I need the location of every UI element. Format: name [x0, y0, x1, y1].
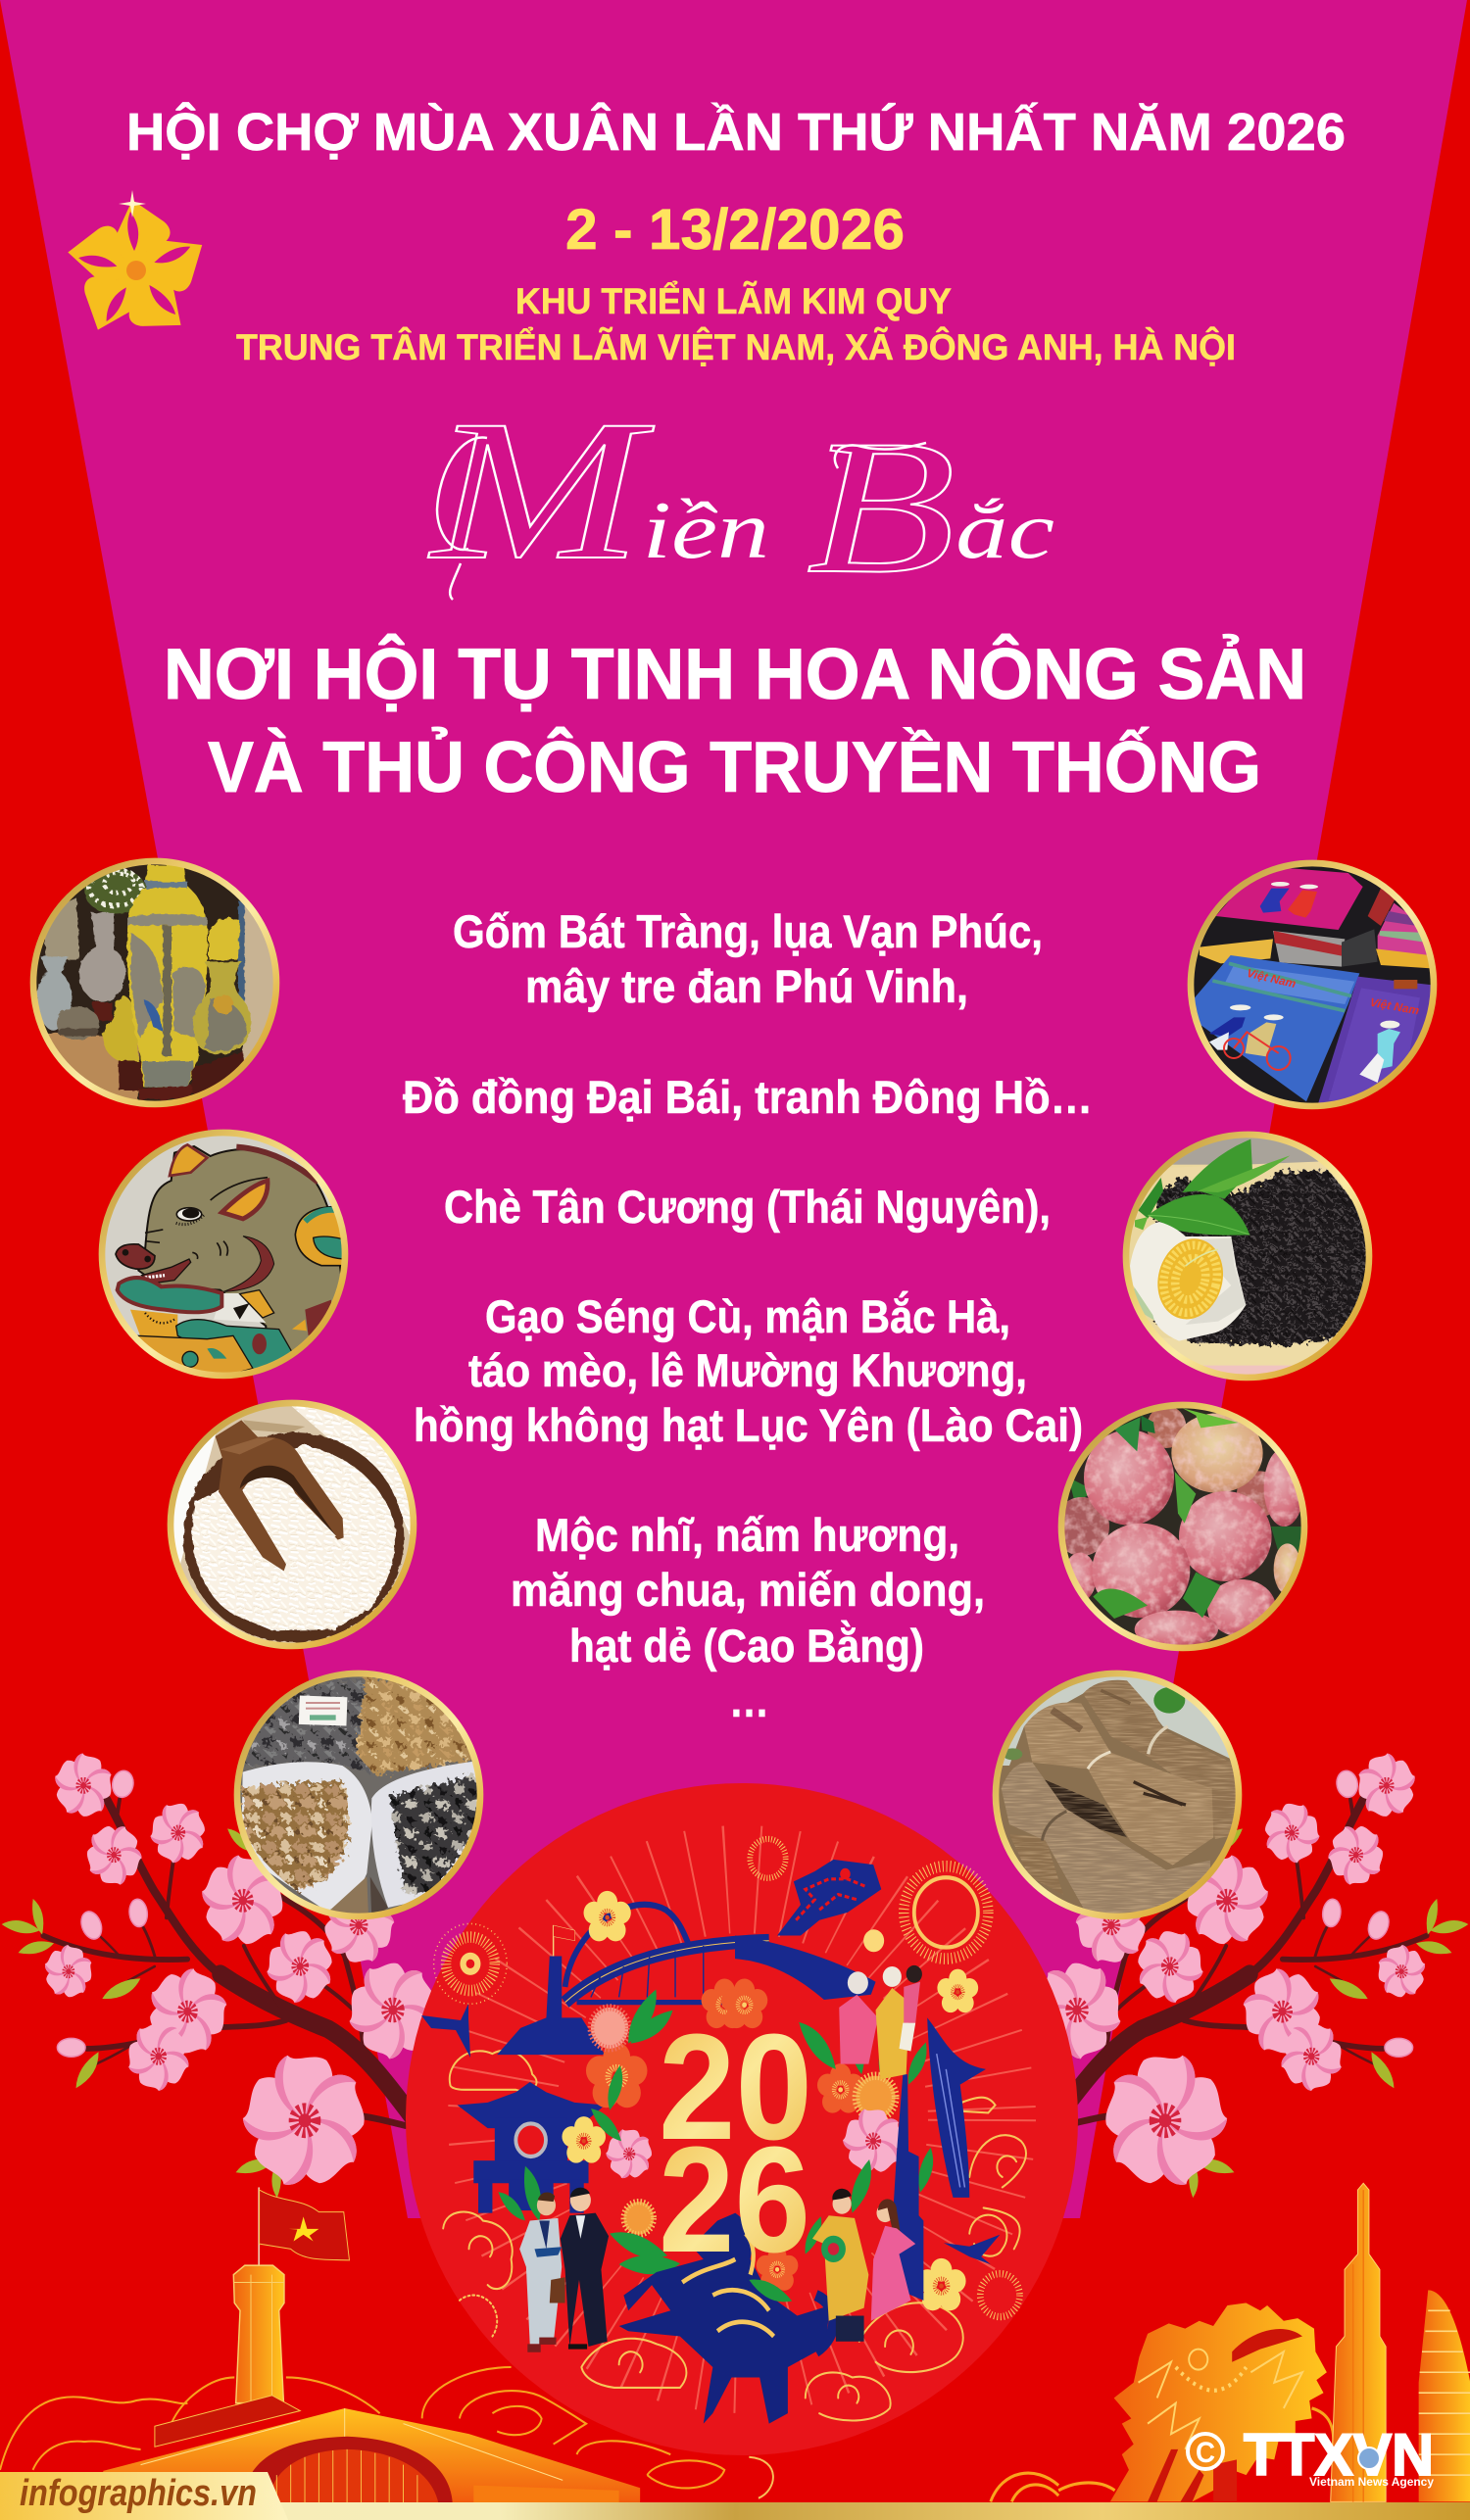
flagpole and flag — [259, 2187, 349, 2267]
Landmark tower — [1331, 2183, 1386, 2501]
header: fair title: HỘI CHỢ MÙA XUÂN LẦN THỨ NHẤT NĂM 2026 — [126, 102, 1346, 162]
bridge and dragon arch — [565, 1905, 769, 2003]
left bottom illustration: flag tower and dome — [0, 2187, 724, 2503]
emblem flowers left — [496, 1891, 748, 2277]
TTXVN logo: C — [1196, 2437, 1215, 2469]
bottom gold strip — [0, 2502, 1470, 2520]
emblem flowers right — [721, 1969, 978, 2310]
header: dates: 2 - 13/2/2026 — [565, 198, 905, 262]
product list text: Đồ đồng Đại Bái, tranh Đông Hồ… — [403, 1071, 1093, 1123]
product list text: Gốm Bát Tràng, lụa Vạn Phúc, — [453, 905, 1043, 957]
photo: embroidered silk bags: Việt Nam — [1369, 995, 1421, 1017]
script heading: Miền Bắc — [427, 379, 1054, 613]
right peach blossom branch — [1019, 1747, 1469, 2198]
product list text: Gạo Séng Cù, mận Bắc Hà, — [485, 1290, 1010, 1342]
sun firework — [434, 1923, 507, 2004]
script heading: Miền Bắc: M iền — [427, 379, 769, 602]
photo: Dong Ho folk painting pig — [96, 1127, 354, 1388]
emblem right half artwork — [721, 1839, 1026, 2420]
Bitexco tower — [1419, 2290, 1470, 2501]
horse — [619, 2213, 834, 2424]
main headline: NƠI HỘI TỤ TINH HOA NÔNG SẢN — [164, 635, 1306, 714]
product list text: … — [729, 1674, 769, 1726]
family group — [839, 1965, 922, 2079]
emblem left half artwork — [434, 1891, 834, 2424]
photo: dong vermicelli bundles — [990, 1668, 1245, 1922]
main headline: VÀ THỦ CÔNG TRUYỀN THỐNG — [208, 727, 1261, 807]
product list text: Mộc nhĩ, nấm hương, — [535, 1509, 959, 1561]
script heading: Miền Bắc: B — [807, 401, 956, 613]
couple in ao dai — [812, 2189, 915, 2342]
header: venue — [236, 280, 1236, 367]
lion dance head — [1110, 2302, 1334, 2501]
photo: embroidered silk bags: Việt Nam — [1246, 966, 1298, 991]
product list text: mây tre đan Phú Vinh, — [525, 960, 968, 1012]
sun rings — [750, 1839, 1019, 2317]
two businessmen — [519, 2188, 609, 2352]
source tab: infographics.vn: infographics.vn — [20, 2473, 257, 2514]
product list text: hồng không hạt Lục Yên (Lào Cai) — [414, 1399, 1083, 1451]
TTXVN logo: Vietnam News Agency — [1309, 2475, 1434, 2489]
pagoda gate — [458, 2082, 605, 2213]
product list text — [403, 905, 1093, 1726]
photo: Tan Cuong tea — [1120, 1129, 1375, 1383]
photo: dried mushrooms — [231, 1668, 486, 1922]
product list text: măng chua, miến dong, — [511, 1564, 985, 1616]
header: venue: KHU TRIỂN LÃM KIM QUY — [515, 280, 952, 321]
product list text: hạt dẻ (Cao Bằng) — [569, 1620, 924, 1672]
photo: Bac Ha plums — [1054, 1399, 1310, 1654]
exhibition dome — [103, 2408, 640, 2503]
main headline — [164, 635, 1306, 807]
small birds left — [421, 2004, 470, 2058]
year 2026: 26 — [659, 2115, 810, 2284]
year 2026: 20 — [659, 2003, 812, 2171]
logo: gold apricot blossom — [62, 190, 214, 348]
Hanoi flag tower — [155, 2265, 300, 2447]
year 2026 — [659, 2003, 812, 2284]
header: venue: TRUNG TÂM TRIỂN LÃM VIỆT NAM, XÃ ĐÔNG ANH, HÀ NỘI — [236, 326, 1236, 367]
script heading: Miền Bắc: ắc — [956, 485, 1054, 576]
small bird — [944, 2235, 1000, 2264]
photo: Bat Trang ceramics — [29, 858, 280, 1107]
right bottom illustration: lion dance and skyscrapers — [749, 2183, 1470, 2501]
TTXVN logo: TTXVN — [1244, 2422, 1434, 2488]
product list text: táo mèo, lê Mường Khương, — [468, 1344, 1027, 1396]
photo: embroidered silk bags — [1185, 857, 1440, 1112]
product list text: Chè Tân Cương (Thái Nguyên), — [444, 1181, 1051, 1233]
flag tower in blue — [497, 1956, 605, 2055]
festival emblem circle — [406, 1783, 1078, 2455]
left peach blossom branch — [1, 1747, 451, 2198]
blue towers — [892, 2017, 986, 2301]
photo: bowl of rice — [165, 1397, 422, 1652]
dragon head — [777, 1860, 881, 1935]
